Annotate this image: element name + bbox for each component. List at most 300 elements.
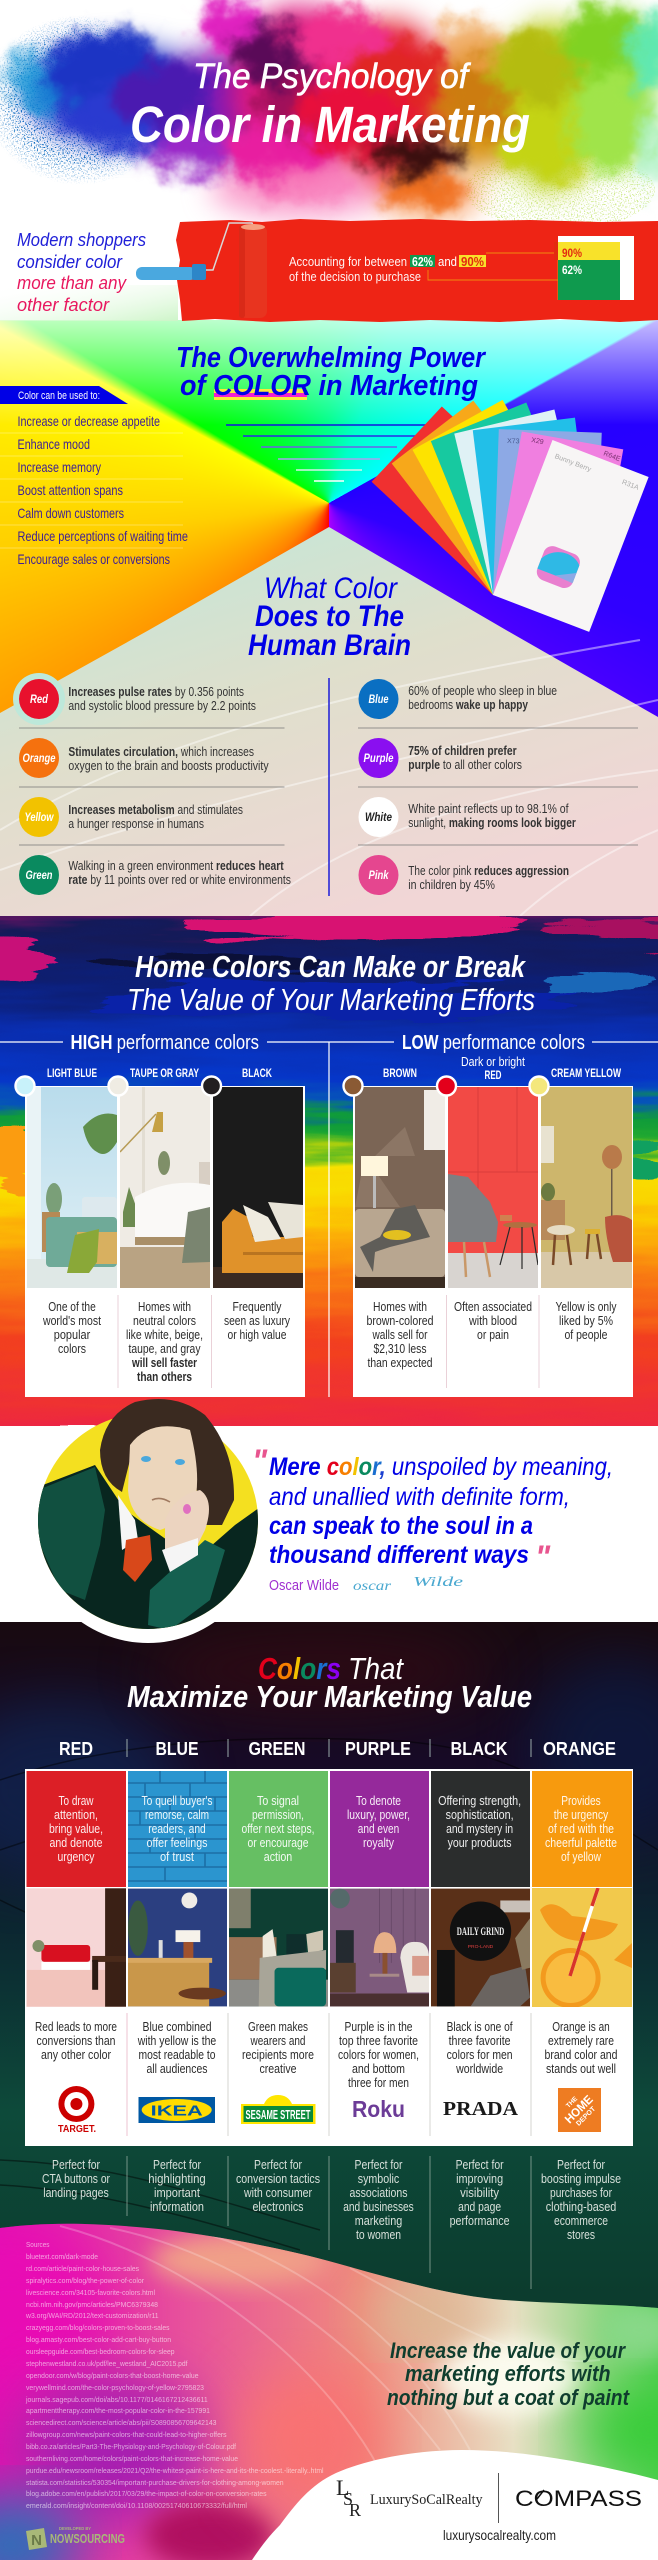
- panel: color table frame: [25, 1769, 633, 2146]
- heading: colors that maximize: That: [348, 1651, 404, 1686]
- connector lines: [428, 253, 558, 300]
- text: sources: emerald.com/insight/content/doi/10.1108/00251740610673332/full/html: [26, 2501, 247, 2510]
- photo: brown room: [355, 1087, 445, 1288]
- title: Color in Marketing: [130, 96, 530, 153]
- logo: LSR: [336, 2475, 361, 2520]
- text: sources: sciencedirect.com/science/article/abs/pii/S0890856709642143: [26, 2418, 216, 2427]
- text: card captions low: $2,310 less: [374, 1342, 426, 1356]
- column headers: RED: [59, 1738, 93, 1759]
- heading: what color does to the human brain: Human Brain: [248, 629, 411, 662]
- item: blue: 60% of people who sleep in blue: [408, 684, 557, 698]
- tag: color can be used to: [0, 386, 128, 404]
- text: perfect for red: Perfect for: [52, 2158, 100, 2172]
- tile: blue: offer feelings: [146, 1836, 208, 1850]
- tile: orange: cheerful palette: [545, 1836, 617, 1850]
- text: perfect for red: [42, 2158, 110, 2200]
- text: card captions high: neutral colors: [133, 1314, 196, 1328]
- attribution: Oscar Wilde: [269, 1575, 463, 1594]
- panel: dark lower background: [0, 1622, 658, 2322]
- panel: low performance card: [353, 1086, 633, 1397]
- logo: NowSourcing: [26, 2526, 125, 2550]
- text: perfect for green: with consumer: [243, 2186, 312, 2200]
- text: sources: verywellmind.com/the-color-psychology-of-yellow-2795823: [26, 2383, 204, 2392]
- text: black info: three favorite: [449, 2034, 511, 2048]
- panel: gradient footer background: [0, 2220, 658, 2560]
- text: perfect for purple: associations: [350, 2186, 408, 2200]
- text: accounting statistic: and: [438, 255, 457, 269]
- list: uses of color: Reduce perceptions of waiting time: [18, 528, 188, 544]
- heading: low performance colors: LOW: [402, 1032, 439, 1054]
- text: black info: [447, 2020, 513, 2076]
- list: uses of color: Increase memory: [18, 459, 101, 475]
- icon: paint swatch fan: R31A: [621, 479, 640, 492]
- text: perfect for black: visibility: [460, 2186, 500, 2200]
- item: white: White paint reflects up to 98.1% of: [408, 802, 569, 816]
- tile: orange: of yellow: [561, 1850, 602, 1864]
- text: card captions low: Yellow is only: [556, 1300, 617, 1314]
- quote text: can speak to the soul in a: [269, 1512, 533, 1540]
- text: purple info: three for men: [348, 2076, 409, 2090]
- item: purple: 75% of children prefer: [408, 744, 517, 758]
- item: green: [19, 855, 291, 895]
- list: uses of color: Boost attention spans: [18, 482, 123, 498]
- tag: color can be used to: Color can be used to:: [18, 390, 100, 402]
- text: sources: Sources: [26, 2240, 50, 2249]
- tile: blue: readers, and: [148, 1822, 206, 1836]
- icon: paint swatch fan: X29: [531, 437, 544, 446]
- item: orange: [19, 738, 269, 778]
- text: card captions low: with blood: [468, 1314, 517, 1328]
- tile: orange: of red with the: [548, 1822, 614, 1836]
- text: orange info: brand color and: [544, 2048, 618, 2062]
- heading: what color does to the human brain: [248, 572, 411, 662]
- item: blue: [358, 679, 557, 719]
- heading: what color does to the human brain: Does to The: [255, 600, 404, 633]
- tile: red: To draw: [58, 1794, 94, 1808]
- text: purple info: colors for women,: [338, 2048, 419, 2062]
- text: sources: [25, 2240, 324, 2510]
- tile: black: Offering strength,: [438, 1794, 521, 1808]
- text: perfect for orange: [541, 2158, 621, 2242]
- column headers: GREEN: [248, 1738, 306, 1759]
- callout: modern shoppers: consider color: [17, 251, 123, 272]
- attribution: Oscar Wilde: oscar: [353, 1579, 392, 1594]
- text: perfect for black: [450, 2158, 510, 2228]
- tile: orange: Provides: [561, 1794, 601, 1808]
- panel: quote strip: [0, 1426, 658, 1622]
- text: accounting statistic: Accounting for between: [289, 255, 407, 269]
- logo: LSR: S: [343, 2489, 353, 2509]
- tile: black: [431, 1771, 530, 1887]
- item: green: rate by 11 points over red or white environments: [68, 873, 291, 887]
- item: pink: in children by 45%: [408, 878, 495, 892]
- logo: Home Depot: DEPOT: [575, 2105, 598, 2128]
- text: perfect for black: improving: [456, 2172, 503, 2186]
- list: uses of color: [0, 413, 188, 567]
- title: The Psychology of: [193, 57, 471, 96]
- item: pink: Pink: [368, 868, 390, 882]
- attribution: Oscar Wilde: Oscar Wilde: [269, 1577, 339, 1594]
- text: perfect for blue: information: [150, 2200, 204, 2214]
- tile: purple: and even: [358, 1822, 399, 1836]
- text: sources: stephenwestland.co.uk/pdf/lee_westland_AIC2015.pdf: [26, 2359, 188, 2368]
- text: perfect for purple: [343, 2158, 414, 2242]
- text: black info: colors for men: [447, 2048, 513, 2062]
- text: orange info: stands out well: [546, 2062, 616, 2076]
- logo: LuxurySoCalRealty: LuxurySoCalRealty: [370, 2492, 483, 2508]
- text: card captions low: Often associated: [454, 1300, 532, 1314]
- tile: black: sophistication,: [446, 1808, 514, 1822]
- tile: red: and denote: [50, 1836, 103, 1850]
- panel: what color does, pale background: [0, 527, 658, 916]
- logo: IKEA: IKEA: [151, 2104, 203, 2120]
- column labels: CREAM YELLOW: [551, 1068, 621, 1080]
- item: white: sunlight, making rooms look bigger: [408, 816, 576, 830]
- text: card captions low: liked by 5%: [559, 1314, 613, 1328]
- decorative fading lines: [226, 424, 432, 426]
- icon: paint swatch fan: Bunny Berry: [554, 453, 592, 474]
- column headers: PURPLE: [345, 1738, 411, 1759]
- heading: overwhelming power: [176, 342, 486, 402]
- list: uses of color: Enhance mood: [18, 436, 90, 452]
- text: sources: apartmenttherapy.com/the-most-popular-color-in-the-157991: [26, 2406, 210, 2415]
- text: blue info: with yellow is the: [137, 2034, 216, 2048]
- heading: high performance colors: [70, 1032, 259, 1054]
- item: green: Green: [26, 868, 52, 882]
- column labels: RED: [484, 1070, 502, 1082]
- logo: NowSourcing: DEVELOPED BY: [59, 2526, 91, 2531]
- text: sources: bibb.co.za/articles/Part3-The-Physiology-and-Psychology-of-Colour.pdf: [26, 2442, 237, 2451]
- photo: black room: [213, 1087, 303, 1288]
- heading: high performance colors: performance colors: [117, 1032, 259, 1054]
- column labels: TAUPE OR GRAY: [130, 1068, 199, 1080]
- text: sources: statista.com/statistics/530354/important-purchase-drivers-for-clothing-among-women: [26, 2478, 284, 2487]
- text: orange info: Orange is an: [552, 2020, 610, 2034]
- tile: blue: of trust: [160, 1850, 194, 1864]
- photo: black product: PRO-LAND: [468, 1944, 494, 1950]
- item: pink: [358, 855, 569, 895]
- text: blue info: [137, 2020, 216, 2076]
- text: perfect for purple: symbolic: [358, 2172, 399, 2186]
- text: perfect for purple: to women: [356, 2228, 401, 2242]
- tile: orange: the urgency: [554, 1808, 609, 1822]
- bar chart: 62 to 90 percent: [554, 236, 634, 300]
- text: accounting statistic: 90%: [461, 255, 484, 269]
- heading: colors that maximize: Maximize Your Marketing Value: [127, 1679, 532, 1714]
- tile: red: urgency: [58, 1850, 95, 1864]
- item: yellow: a hunger response in humans: [68, 817, 204, 831]
- text: perfect for orange: Perfect for: [557, 2158, 605, 2172]
- item: orange: oxygen to the brain and boosts productivity: [68, 759, 269, 773]
- color dots: [16, 1076, 548, 1096]
- text: sources: blog.adobe.com/en/publish/2017/03/29/the-impact-of-color-on-conversion-rates: [26, 2489, 267, 2498]
- panel: red paint band: [176, 219, 658, 322]
- text: perfect for orange: stores: [567, 2228, 595, 2242]
- tile: green: To signal: [257, 1794, 299, 1808]
- text: blue info: Blue combined: [142, 2020, 212, 2034]
- logo: Target: TARGET.: [58, 2124, 96, 2135]
- tile: purple: [330, 1771, 429, 1887]
- column headers: BLUE: [156, 1738, 198, 1759]
- list: uses of color: Calm down customers: [18, 505, 124, 521]
- logo: IKEA: [138, 2097, 215, 2123]
- callout: modern shoppers: more than any: [17, 272, 128, 293]
- item: blue: Blue: [368, 692, 389, 706]
- tile: green: [229, 1771, 328, 1887]
- quote text: [252, 1443, 613, 1575]
- text: sources: w3.org/WAI/RD/2012/text-customization/r11: [25, 2311, 159, 2320]
- heading: home colors: [127, 949, 535, 1017]
- item: orange: Orange: [22, 751, 56, 765]
- bar chart: 62 to 90 percent: 62%: [562, 265, 582, 277]
- logo: NowSourcing: N: [31, 2532, 42, 2549]
- text: perfect for orange: clothing-based: [546, 2200, 616, 2214]
- photo: light blue room: [27, 1087, 117, 1288]
- photo: orange slices: [532, 1888, 632, 2007]
- panel: hero paint splash background: [0, 0, 658, 320]
- bar chart: 62 to 90 percent: 90%: [562, 248, 582, 260]
- quote text: ": [535, 1539, 551, 1575]
- item: red: and systolic blood pressure by 2.2 points: [68, 699, 256, 713]
- column labels: BLACK: [242, 1068, 273, 1080]
- text: accounting statistic: 62%: [412, 255, 433, 269]
- heading: home colors: The Value of Your Marketing Efforts: [127, 982, 535, 1017]
- item: yellow: [19, 797, 243, 837]
- text: blue info: most readable to: [138, 2048, 216, 2062]
- text: red info: Red leads to more: [35, 2020, 117, 2034]
- tile: blue: [128, 1771, 227, 1887]
- quote text: ": [252, 1443, 268, 1479]
- heading: overwhelming power: The Overwhelming Power: [176, 342, 486, 374]
- logo: Target: [58, 2086, 96, 2135]
- text: sources: spiralytics.com/blog/the-power-of-color: [26, 2276, 144, 2285]
- tile: green: action: [264, 1850, 292, 1864]
- text: red info: any other color: [41, 2048, 111, 2062]
- photo: purple room: [330, 1888, 429, 2006]
- callout: increase the value: [387, 2338, 630, 2410]
- tile: black: and mystery in: [446, 1822, 513, 1836]
- logo: Home Depot: THE: [565, 2095, 580, 2110]
- heading: colors that maximize: [127, 1651, 532, 1714]
- heading: colors that maximize: Colors: [258, 1651, 341, 1686]
- logo: Roku: Roku: [352, 2096, 405, 2122]
- text: perfect for orange: ecommerce: [554, 2214, 608, 2228]
- list: uses of color: Increase or decrease appetite: [18, 413, 160, 429]
- callout: modern shoppers: Modern shoppers: [17, 229, 146, 250]
- attribution: Oscar Wilde: Wilde: [413, 1575, 463, 1590]
- item: purple: [358, 738, 522, 778]
- column headers: [59, 1738, 616, 1759]
- photo: taupe bedroom: [120, 1087, 210, 1288]
- logo: LSR: L: [336, 2475, 349, 2500]
- panel: rainbow wedge background: [0, 320, 658, 720]
- text: card captions high: colors: [58, 1342, 86, 1356]
- pale corner fade: [0, 285, 178, 321]
- text: card captions low: or pain: [477, 1328, 509, 1342]
- text: sources: zillowgroup.com/news/paint-colors-that-could-lead-to-higher-offers: [26, 2430, 227, 2439]
- text: card captions low: Homes with: [373, 1300, 427, 1314]
- text: card captions high: world's most: [42, 1314, 101, 1328]
- text: card captions high: seen as luxury: [224, 1314, 291, 1328]
- panel: high performance card: [25, 1086, 305, 1397]
- text: sources: opendoor.com/w/blog/paint-colors-that-boost-home-value: [26, 2371, 198, 2380]
- text: perfect for red: landing pages: [43, 2186, 109, 2200]
- logo: LSR: R: [349, 2500, 361, 2520]
- text: purple info: Purple is in the: [344, 2020, 413, 2034]
- item: blue: bedrooms wake up happy: [408, 698, 528, 712]
- text: green info: wearers and: [250, 2034, 306, 2048]
- logo: Prada: PRADA: [443, 2098, 519, 2120]
- item: white: White: [365, 810, 392, 824]
- list: uses of color: Encourage sales or conversions: [18, 551, 170, 567]
- logo: Compass: COMPASS: [515, 2486, 642, 2511]
- text: card captions high: One of the: [48, 1300, 96, 1314]
- text: perfect for blue: highlighting: [148, 2172, 206, 2186]
- quote text: Mere color, unspoiled by meaning,: [269, 1453, 613, 1481]
- text: perfect for green: Perfect for: [254, 2158, 302, 2172]
- tile: green: or encourage: [248, 1836, 309, 1850]
- text: perfect for green: [236, 2158, 320, 2214]
- text: card captions high: Frequently: [232, 1300, 282, 1314]
- column labels: [47, 1055, 621, 1082]
- panel: separators: [126, 2013, 128, 2136]
- title: [130, 57, 530, 153]
- logo: Sesame Street: [241, 2095, 316, 2124]
- divider lines: [0, 1042, 658, 1397]
- text: orange info: extremely rare: [548, 2034, 614, 2048]
- text: accounting statistic: [289, 255, 486, 284]
- text: card captions high: [42, 1295, 291, 1388]
- item: red: Red: [30, 692, 49, 706]
- text: purple info: [338, 2020, 419, 2090]
- text: card captions high: or high value: [228, 1328, 287, 1342]
- text: sources: bluetext.com/dark-mode: [26, 2252, 98, 2261]
- text: green info: recipients more: [242, 2048, 314, 2062]
- text: card captions high: popular: [54, 1328, 90, 1342]
- callout: increase the value: marketing efforts with: [405, 2361, 611, 2386]
- text: sources: ncbi.nlm.nih.gov/pmc/articles/PMC6379348: [26, 2300, 158, 2309]
- icon: paint swatch fan: R64E: [602, 450, 621, 463]
- column labels: Dark or bright: [461, 1055, 525, 1069]
- text: card captions low: of people: [564, 1328, 608, 1342]
- text: red info: conversions than: [36, 2034, 116, 2048]
- text: green info: Green makes: [248, 2020, 308, 2034]
- text: perfect for black: and page: [458, 2200, 501, 2214]
- text: perfect for blue: Perfect for: [153, 2158, 201, 2172]
- text: card captions low: [366, 1295, 617, 1388]
- item: orange: Stimulates circulation, which increases: [68, 745, 254, 759]
- logo: Home Depot: HOME: [562, 2092, 596, 2126]
- text: sources: rd.com/article/paint-color-house-sales: [26, 2264, 139, 2273]
- text: purple info: top three favorite: [339, 2034, 418, 2048]
- text: black info: Black is one of: [447, 2020, 513, 2034]
- tile: red: bring value,: [49, 1822, 103, 1836]
- tile: orange: [532, 1771, 632, 1887]
- tile: blue: To quell buyer's: [142, 1794, 212, 1808]
- panel: white footer curve: [252, 2450, 658, 2560]
- photo: black product: [431, 1888, 530, 2006]
- text: perfect for blue: important: [154, 2186, 200, 2200]
- text: perfect for green: conversion tactics: [236, 2172, 320, 2186]
- tile: green: permission,: [252, 1808, 304, 1822]
- text: perfect for green: electronics: [252, 2200, 304, 2214]
- text: perfect for blue: [148, 2158, 206, 2214]
- text: perfect for red: CTA buttons or: [42, 2172, 110, 2186]
- heading: low performance colors: performance colors: [443, 1032, 585, 1054]
- callout: increase the value: Increase the value of your: [390, 2338, 626, 2363]
- text: card captions high: than others: [137, 1370, 192, 1384]
- text: sources: blog.amasty.com/best-color-add-cart-buy-button: [26, 2335, 171, 2344]
- callout: modern shoppers: other factor: [17, 294, 110, 315]
- text: sources: livescience.com/34105-favorite-colors.html: [26, 2288, 155, 2297]
- tile: black: your products: [448, 1836, 512, 1850]
- text: sources: purdue.edu/newsroom/releases/2021/Q2/the-whitest-paint-is-here-and-its-the-coolest.-literally..html: [26, 2466, 324, 2475]
- text: black info: worldwide: [455, 2062, 503, 2076]
- heading: low performance colors: [402, 1032, 585, 1054]
- text: perfect for orange: boosting impulse: [541, 2172, 621, 2186]
- item: yellow: Increases metabolism and stimulates: [68, 803, 243, 817]
- photo: blue room: [128, 1888, 227, 2006]
- text: card captions high: will sell faster: [131, 1356, 197, 1370]
- item: white: [358, 797, 576, 837]
- item: red: Increases pulse rates by 0.356 points: [68, 685, 244, 699]
- column headers: BLACK: [450, 1738, 508, 1759]
- text: perfect for purple: and businesses: [343, 2200, 414, 2214]
- logo: Home Depot: [558, 2088, 601, 2132]
- text: purple info: and bottom: [352, 2062, 405, 2076]
- tile: red: attention,: [54, 1808, 98, 1822]
- quote text: and unallied with definite form,: [269, 1483, 570, 1511]
- heading: what color does to the human brain: What Color: [264, 572, 398, 605]
- logo: Sesame Street: SESAME STREET: [246, 2107, 311, 2122]
- text: sources: oursleepguide.com/best-bedroom-colors-for-sleep: [26, 2347, 174, 2356]
- text: accounting statistic: of the decision to purchase: [289, 270, 421, 284]
- text: perfect for purple: Perfect for: [354, 2158, 402, 2172]
- photo: red sofa room: [26, 1888, 126, 2007]
- item: pink: The color pink reduces aggression: [408, 864, 569, 878]
- icon: paint swatch fan: X73: [507, 438, 520, 445]
- quote text: thousand different ways: [269, 1541, 529, 1569]
- photo: green room: [229, 1888, 328, 2006]
- text: card captions high: like white, beige,: [126, 1328, 203, 1342]
- logo: NowSourcing: NOWSOURCING: [50, 2531, 125, 2546]
- text: sources: crazyegg.com/blog/colors-proven-to-boost-sales: [26, 2323, 170, 2332]
- text: green info: [242, 2020, 314, 2076]
- text: red info: [35, 2020, 117, 2062]
- icon: paint roller: [136, 223, 267, 318]
- tile: purple: luxury, power,: [347, 1808, 410, 1822]
- text: perfect for orange: purchases for: [550, 2186, 612, 2200]
- item: yellow: Yellow: [24, 810, 54, 824]
- panel: painted canvas background: [0, 900, 658, 1440]
- text: card captions high: taupe, and gray: [128, 1342, 201, 1356]
- text: card captions high: Homes with: [138, 1300, 191, 1314]
- text: sources: journals.sagepub.com/doi/abs/10.1177/0146167212436611: [25, 2395, 208, 2404]
- text: perfect for black: performance: [450, 2214, 510, 2228]
- text: perfect for purple: marketing: [355, 2214, 402, 2228]
- column labels: BROWN: [383, 1068, 417, 1080]
- text: sources: southernliving.com/home/colors/paint-colors-that-increase-home-value: [26, 2454, 238, 2463]
- heading: home colors: Home Colors Can Make or Break: [135, 949, 526, 984]
- text: perfect for black: Perfect for: [456, 2158, 504, 2172]
- heading: overwhelming power: of COLOR in Marketing: [180, 370, 478, 402]
- website url: luxurysocalrealty.com: [443, 2527, 556, 2543]
- text: card captions low: brown-colored: [366, 1314, 434, 1328]
- callout: increase the value: nothing but a coat of paint: [387, 2385, 630, 2410]
- item: green: Walking in a green environment reduces heart: [68, 859, 284, 873]
- item: purple: purple to all other colors: [408, 758, 522, 772]
- photo: cream yellow room: [541, 1087, 632, 1288]
